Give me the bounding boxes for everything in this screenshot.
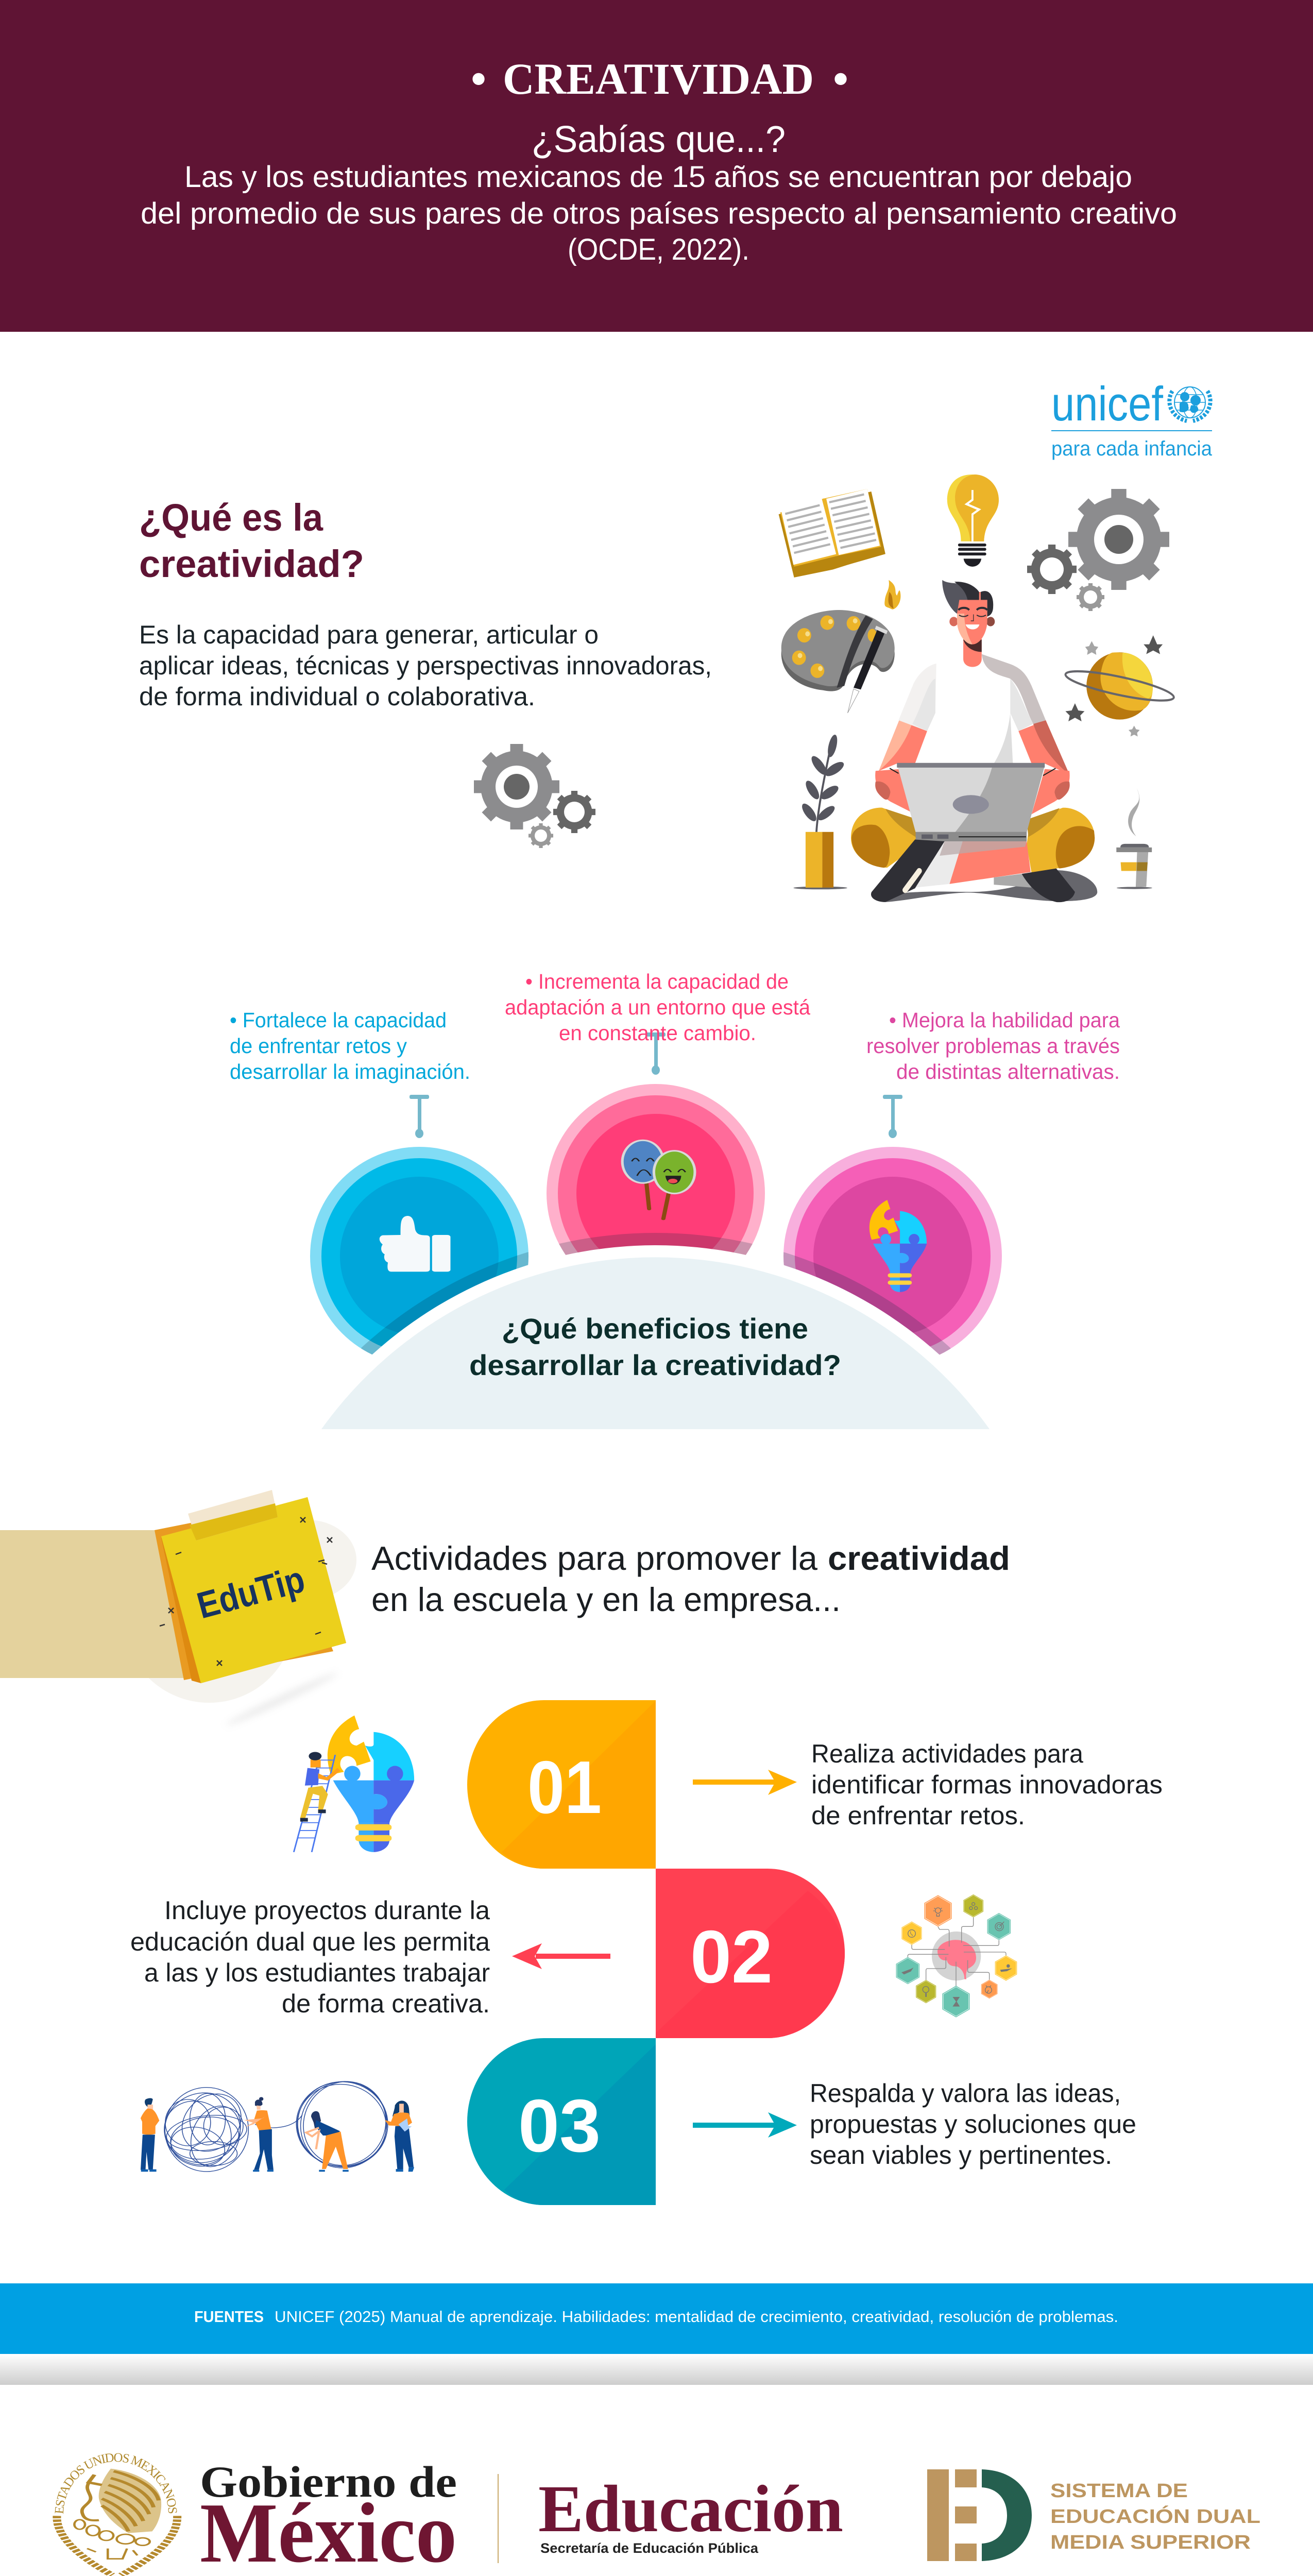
icon: people with scribbles <box>141 2076 414 2175</box>
connector: pink <box>646 1032 666 1075</box>
step 03 <box>141 2038 1136 2205</box>
icon: small gears <box>474 744 595 848</box>
text 03: Respalda y valora las ideas, <box>810 2079 1121 2108</box>
unicef logo <box>1051 377 1213 460</box>
benefit text: blue <box>230 1008 470 1083</box>
text 02: de forma creativa. <box>282 1989 490 2018</box>
icon: coffee cup <box>1116 788 1152 889</box>
sources band: FUENTES <box>194 2308 264 2326</box>
logo: sistema de educación dual: SISTEMA DE <box>1050 2480 1188 2502</box>
icon: flame <box>884 580 900 609</box>
pill 03 <box>467 2038 656 2205</box>
logo: sistema de educación dual <box>927 2469 1260 2561</box>
icon: masks <box>622 1140 695 1219</box>
heading: actividades: Actividades para promover la <box>371 1539 818 1577</box>
header text: Las y los estudiantes mexicanos de 15 años se encuentran por debajo <box>184 160 1132 194</box>
sources band: UNICEF (2025) Manual de aprendizaje. Habilidades: mentalidad de crecimiento, creatividad, resolución de problemas. <box>275 2308 1118 2326</box>
benefit text: pink <box>505 970 810 1045</box>
heading: beneficios <box>469 1312 841 1381</box>
icon: puzzle bulb with ladder <box>294 1716 414 1852</box>
text 02 <box>130 1896 490 2018</box>
benefit circle: blue <box>310 1147 528 1365</box>
pill 01 <box>467 1700 656 1869</box>
benefits diagram <box>231 974 1120 1429</box>
unicef logo: unicef <box>1051 377 1164 431</box>
arrow 02 <box>512 1943 610 1969</box>
benefit text: magenta <box>866 1008 1120 1083</box>
definition text: de forma individual o colaborativa. <box>139 682 535 711</box>
icon: gears <box>1027 489 1169 611</box>
step 01 <box>294 1700 1163 1869</box>
heading: beneficios: desarrollar la creatividad? <box>469 1349 841 1381</box>
benefit text: pink: en constante cambio. <box>559 1021 756 1045</box>
heading: actividades: creatividad <box>828 1539 1010 1577</box>
pill 02: 02 <box>690 1915 773 1998</box>
logo: sistema de educación dual: MEDIA SUPERIOR <box>1050 2532 1251 2553</box>
heading: actividades: en la escuela y en la empresa... <box>371 1581 841 1618</box>
benefit text: magenta: • Mejora la habilidad para <box>889 1008 1120 1032</box>
header text <box>141 160 1177 266</box>
unicef logo: para cada infancia <box>1051 437 1213 460</box>
arrow 01 <box>693 1770 797 1795</box>
text 03: sean viables y pertinentes. <box>810 2141 1112 2170</box>
title: • <box>833 54 848 104</box>
icon: planet <box>1064 635 1175 737</box>
logo: educación: Secretaría de Educación Pública <box>540 2540 759 2556</box>
header text: (OCDE, 2022). <box>568 233 749 266</box>
person <box>851 580 1097 902</box>
subtitle: ¿Sabías que...? <box>532 119 786 160</box>
header text: del promedio de sus pares de otros países respecto al pensamiento creativo <box>141 197 1177 230</box>
icon: unicef emblem <box>1169 387 1210 421</box>
edutip note <box>0 1490 356 1728</box>
text 01: identificar formas innovadoras <box>811 1770 1163 1799</box>
icon: puzzle bulb <box>869 1200 927 1292</box>
heading: qué es la creatividad: creatividad? <box>139 543 364 585</box>
benefit text: magenta: de distintas alternativas. <box>896 1060 1120 1083</box>
pill 02 <box>656 1869 845 2038</box>
benefit text: blue: desarrollar la imaginación. <box>230 1060 470 1083</box>
connector: magenta <box>883 1095 902 1138</box>
benefit text: blue: • Fortalece la capacidad <box>230 1008 447 1032</box>
benefit text: pink: adaptación a un entorno que está <box>505 995 810 1019</box>
definition text: aplicar ideas, técnicas y perspectivas innovadoras, <box>139 651 712 680</box>
logo: educación: Educación <box>538 2472 843 2546</box>
benefit text: magenta: resolver problemas a través <box>866 1034 1120 1058</box>
heading: actividades <box>371 1539 1010 1618</box>
benefit circle: pink <box>547 1084 765 1302</box>
pill 01: 01 <box>527 1745 602 1829</box>
arrow 03 <box>693 2112 797 2138</box>
icon: book <box>779 489 885 578</box>
benefit text: blue: de enfrentar retos y <box>230 1034 407 1058</box>
text 02: a las y los estudiantes trabajar <box>144 1958 490 1987</box>
text 02: educación dual que les permita <box>130 1927 490 1956</box>
heading: qué es la creatividad: ¿Qué es la <box>139 496 323 539</box>
benefit circle: magenta <box>783 1147 1002 1365</box>
logo: escudo nacional: ESTADOS UNIDOS MEXICANOS <box>55 2453 177 2514</box>
sources band <box>0 2283 1313 2385</box>
logo: sistema de educación dual: EDUCACIÓN DUAL <box>1050 2505 1260 2528</box>
text 01 <box>811 1739 1163 1830</box>
heading: beneficios: ¿Qué beneficios tiene <box>502 1312 808 1345</box>
step 02 <box>130 1869 1017 2038</box>
connector: blue <box>410 1095 429 1138</box>
icon: brain with hexagons <box>896 1894 1017 2018</box>
text 02: Incluye proyectos durante la <box>164 1896 490 1925</box>
header banner <box>0 0 1313 332</box>
text 03 <box>810 2079 1136 2170</box>
illustration: person with laptop <box>779 474 1175 902</box>
icon: light bulb <box>947 474 999 567</box>
icon: thumbs up <box>380 1216 450 1272</box>
icon: plant <box>793 734 847 889</box>
text 01: Realiza actividades para <box>811 1739 1083 1768</box>
text 01: de enfrentar retos. <box>811 1801 1025 1830</box>
pill 03: 03 <box>518 2084 601 2167</box>
text 03: propuestas y soluciones que <box>810 2110 1136 2139</box>
logo: gobierno de méxico: Gobierno de <box>200 2457 457 2506</box>
benefit text: pink: • Incrementa la capacidad de <box>525 970 789 993</box>
dome <box>321 1257 990 1429</box>
definition text: Es la capacidad para generar, articular o <box>139 620 599 649</box>
icon: palette <box>781 610 895 713</box>
title: CREATIVIDAD <box>503 54 814 104</box>
logo: escudo nacional <box>53 2453 181 2576</box>
title: • <box>471 54 486 104</box>
definition text <box>139 620 712 711</box>
heading: qué es la creatividad <box>139 496 364 585</box>
edutip note: EduTip <box>193 1558 309 1626</box>
